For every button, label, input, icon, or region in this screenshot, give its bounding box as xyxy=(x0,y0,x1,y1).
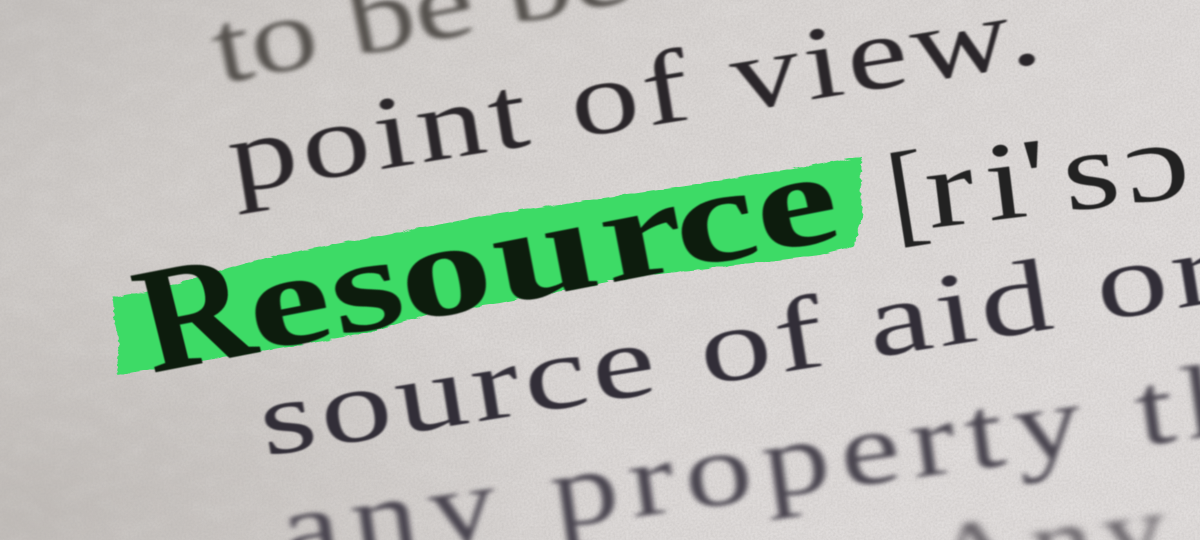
highlighted word: Resource xyxy=(119,122,849,405)
pronunciation: [ri'sɔ xyxy=(878,97,1196,259)
text line: source of aid or: source of aid or xyxy=(250,210,1200,479)
letters: esource: esource xyxy=(234,122,849,380)
green highlighter stroke xyxy=(113,157,863,375)
bracket: [ xyxy=(878,127,937,259)
letter: R: R xyxy=(119,220,270,405)
letters: ri'sɔ: ri'sɔ xyxy=(918,97,1196,253)
